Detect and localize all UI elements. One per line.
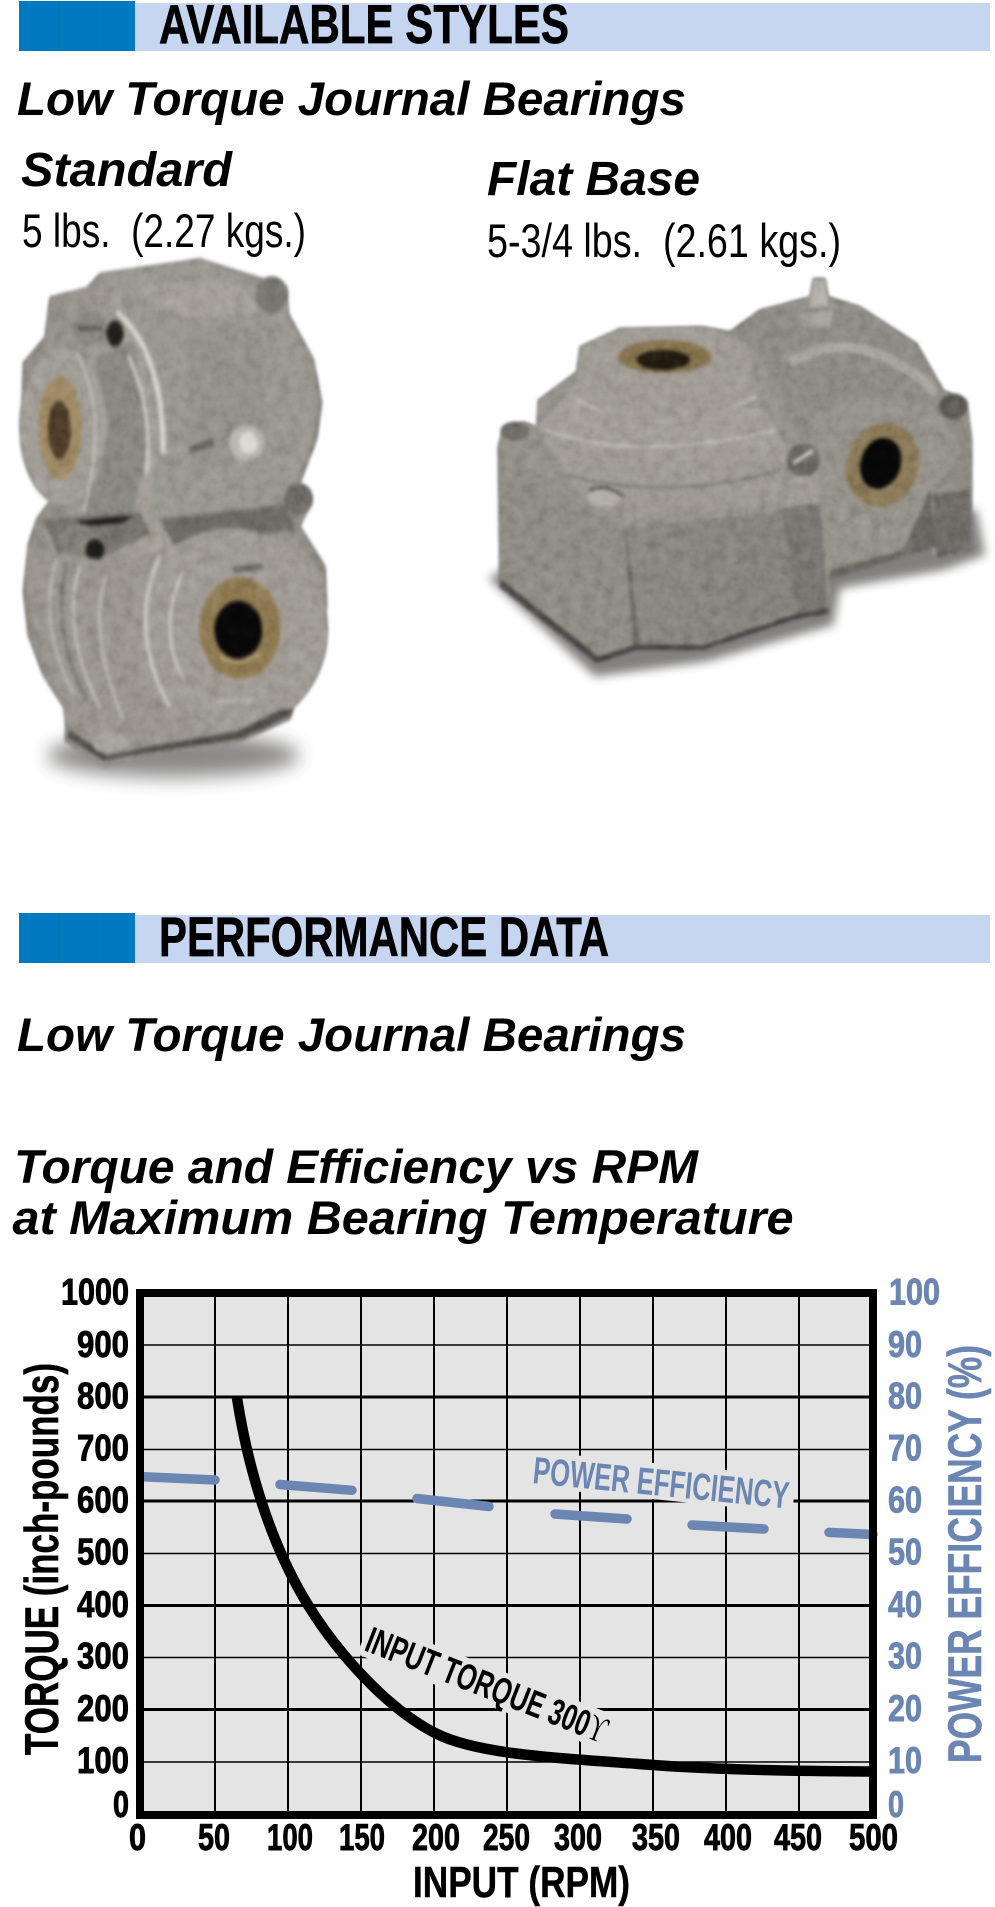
right axis ticks: 10	[888, 1740, 922, 1781]
curve: input torque	[237, 1398, 869, 1772]
style label: flat base	[487, 153, 841, 267]
bottom axis title: INPUT (RPM)	[413, 1858, 630, 1907]
chart title: Torque and Efficiency vs RPM	[14, 1140, 699, 1193]
style label: flat base: Flat Base	[487, 153, 700, 206]
left axis ticks: 1000	[61, 1272, 129, 1313]
style label: standard: 5 lbs. (2.27 kgs.)	[22, 204, 306, 257]
right axis title: POWER EFFICIENCY (%)	[938, 1345, 991, 1763]
bottom axis ticks: 500	[849, 1817, 898, 1858]
bottom axis ticks: 350	[632, 1817, 680, 1858]
style label: flat base: 5-3/4 lbs. (2.61 kgs.)	[487, 214, 841, 267]
bottom axis ticks: 400	[704, 1817, 752, 1858]
left axis ticks: 700	[77, 1428, 129, 1469]
right axis ticks: 50	[888, 1532, 922, 1573]
right axis ticks: 80	[888, 1376, 922, 1417]
header: performance data: PERFORMANCE DATA	[159, 905, 609, 968]
bottom axis ticks: 100	[267, 1817, 313, 1858]
left axis ticks	[61, 1272, 129, 1825]
left axis ticks: 300	[77, 1636, 129, 1677]
right axis ticks: 60	[888, 1480, 922, 1521]
photo: standard bearing housing	[20, 259, 327, 777]
chart title: at Maximum Bearing Temperature	[12, 1191, 793, 1244]
photo: flat base bearing housing	[488, 278, 985, 677]
label backgrounds	[357, 1451, 796, 1750]
bottom axis ticks: 50	[198, 1817, 230, 1858]
chart: torque and efficiency vs rpm	[140, 1293, 873, 1815]
left axis ticks: 0	[113, 1784, 129, 1825]
plot background	[140, 1293, 873, 1815]
header: performance data	[19, 905, 990, 968]
left axis ticks: 100	[77, 1740, 129, 1781]
right axis ticks: 30	[888, 1636, 922, 1677]
label: power efficiency: POWER EFFICIENCY	[531, 1450, 791, 1517]
left axis title: TORQUE (inch-pounds)	[15, 1363, 68, 1755]
bottom axis ticks	[129, 1817, 898, 1858]
right axis ticks: 0	[888, 1784, 904, 1825]
bottom axis ticks: 150	[339, 1817, 385, 1858]
right axis ticks: 100	[889, 1272, 940, 1313]
bottom axis ticks: 300	[554, 1817, 602, 1858]
right axis ticks: 70	[888, 1428, 922, 1469]
chart title	[12, 1140, 793, 1244]
subtitle: low torque journal bearings: Low Torque Journal Bearings	[17, 72, 686, 125]
subtitle: low torque journal bearings: Low Torque Journal Bearings	[17, 1008, 686, 1061]
bottom axis ticks: 0	[129, 1817, 146, 1858]
style label: standard: Standard	[21, 144, 234, 197]
style label: standard	[21, 144, 306, 257]
curve: power efficiency	[143, 1477, 873, 1534]
left axis ticks: 400	[77, 1584, 129, 1625]
bottom axis ticks: 200	[412, 1817, 460, 1858]
right axis ticks: 20	[888, 1688, 922, 1729]
left axis ticks: 600	[77, 1480, 129, 1521]
right axis ticks: 40	[888, 1584, 922, 1625]
label: input torque: INPUT TORQUE 300ϒ	[360, 1619, 614, 1752]
right axis ticks: 90	[888, 1324, 922, 1365]
left axis ticks: 900	[77, 1324, 129, 1365]
left axis ticks: 800	[77, 1376, 129, 1417]
right axis ticks	[888, 1272, 940, 1825]
bottom axis ticks: 250	[483, 1817, 530, 1858]
bottom axis ticks: 450	[774, 1817, 822, 1858]
header: available styles	[19, 0, 990, 55]
left axis ticks: 200	[77, 1688, 129, 1729]
chart frame	[140, 1293, 873, 1815]
left axis ticks: 500	[77, 1532, 129, 1573]
